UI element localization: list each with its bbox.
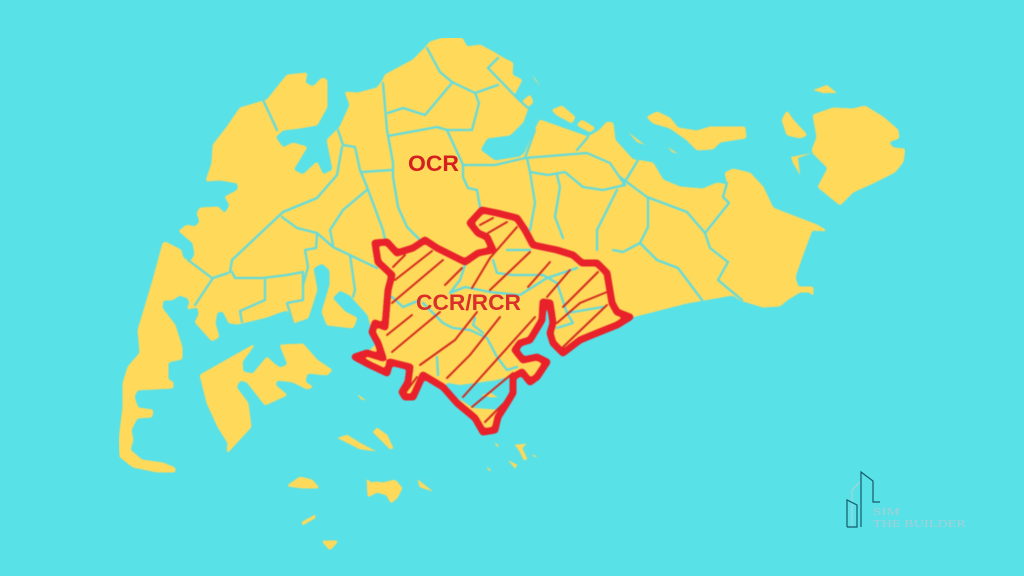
map of Singapore <box>119 38 905 550</box>
red hatching over CCR/RCR <box>387 218 607 422</box>
red outline of CCR/RCR region <box>355 210 630 432</box>
small southern islets <box>302 393 536 525</box>
logo: Sim the Builder <box>847 472 967 530</box>
Sentosa island <box>458 398 503 430</box>
label: OCR: OCR <box>408 151 459 176</box>
main island landmass <box>119 38 827 472</box>
logo: Sim the Builder: THE BUILDER <box>873 518 967 530</box>
logo text: SIM <box>873 506 900 518</box>
western and southern islands <box>200 344 402 550</box>
small northeast islets <box>533 75 837 175</box>
inner bay near the southern tip <box>443 376 511 432</box>
planning area boundaries <box>188 48 742 375</box>
northeast and eastern islands <box>522 95 905 205</box>
logo icon: buildings <box>847 472 880 527</box>
label: CCR/RCR: CCR/RCR <box>416 290 521 315</box>
